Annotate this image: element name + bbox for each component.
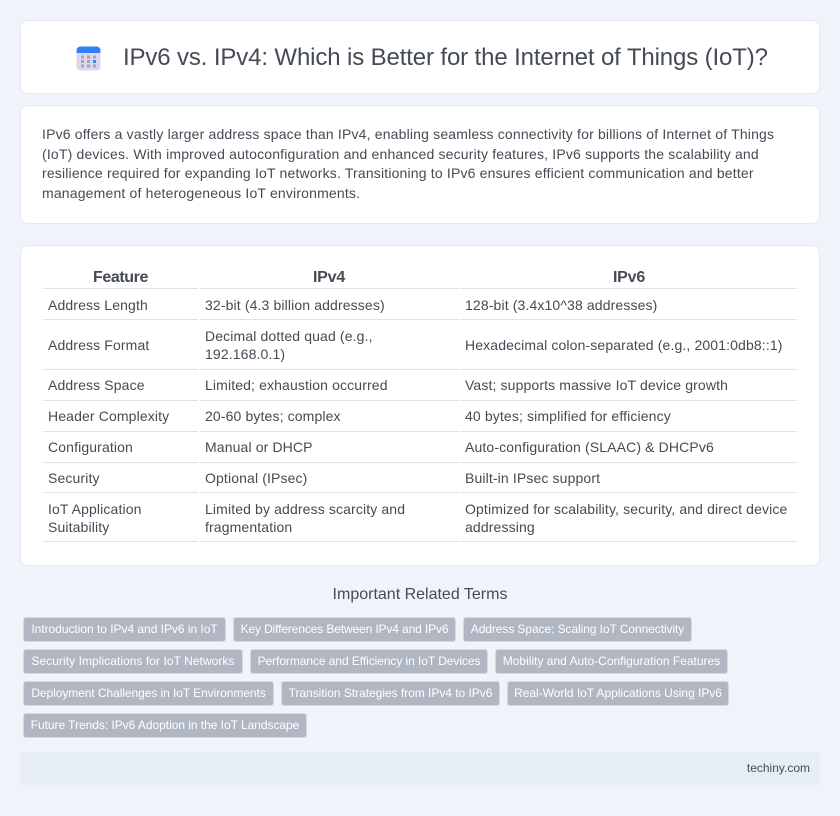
footer [20, 752, 820, 785]
related terms heading: Important Related Terms [333, 586, 507, 603]
row: configuration: Manual or DHCP [205, 439, 313, 455]
row: IoT application suitability [48, 501, 787, 535]
tag [251, 650, 487, 673]
row: header complexity: 40 bytes; simplified for efficiency [465, 408, 671, 424]
tag: Introduction to IPv4 and IPv6 in IoT [31, 622, 218, 636]
intro text [42, 126, 774, 201]
row: address format: Decimal dotted quad (e.g., [205, 328, 373, 344]
footer source: techiny.com [747, 761, 810, 775]
row: address space: Limited; exhaustion occurred [205, 377, 388, 393]
row: IoT application suitability: Suitability [48, 519, 109, 535]
tag [24, 682, 273, 705]
row: IoT application suitability: addressing [465, 519, 535, 535]
tag: Performance and Efficiency in IoT Devices [258, 654, 480, 668]
tag: Future Trends: IPv6 Adoption in the IoT Landscape [31, 718, 299, 732]
row: address format: 192.168.0.1) [205, 346, 285, 362]
tag: Transition Strategies from IPv4 to IPv6 [289, 686, 492, 700]
row: address length: Address Length [48, 297, 148, 313]
row: header complexity: 20-60 bytes; complex [205, 408, 341, 424]
intro text: resilience required for expanding IoT networks. Transitioning to IPv6 ensures efficient communication and better [42, 165, 754, 181]
tag [24, 714, 306, 737]
tag [282, 682, 499, 705]
row: configuration: Auto-configuration (SLAAC) & DHCPv6 [465, 439, 714, 455]
tag: Address Space: Scaling IoT Connectivity [471, 622, 684, 636]
tag [24, 618, 225, 641]
title: IPv6 vs. IPv4: Which is Better for the Internet of Things (IoT)? [123, 44, 768, 71]
panel: introduction [20, 105, 820, 224]
tag [24, 650, 242, 673]
row: security: Optional (IPsec) [205, 470, 307, 486]
row: IoT application suitability: Limited by address scarcity and [205, 501, 405, 517]
tag: Real-World IoT Applications Using IPv6 [514, 686, 722, 700]
row: address format: Address Format [48, 337, 149, 353]
row: IoT application suitability: fragmentation [205, 519, 292, 535]
row: address space: Vast; supports massive IoT device growth [465, 377, 728, 393]
row: header complexity [48, 408, 671, 424]
row: IoT application suitability: IoT Application [48, 501, 142, 517]
table header: Feature [93, 269, 148, 286]
row: header complexity: Header Complexity [48, 408, 169, 424]
row: address length: 32-bit (4.3 billion addresses) [205, 297, 385, 313]
intro text: IPv6 offers a vastly larger address space than IPv4, enabling seamless connectivity for billions of Internet of Things [42, 126, 774, 142]
tag: Mobility and Auto-Configuration Features [503, 654, 720, 668]
table header: IPv6 [613, 269, 645, 286]
tag: Security Implications for IoT Networks [31, 654, 235, 668]
row: IoT application suitability: Optimized for scalability, security, and direct device [465, 501, 787, 517]
row: address length: 128-bit (3.4x10^38 addresses) [465, 297, 657, 313]
row: configuration [48, 439, 714, 455]
tag [508, 682, 728, 705]
table header [93, 269, 645, 286]
tag [234, 618, 455, 641]
panel: title header [20, 20, 820, 94]
row: address space [48, 377, 728, 393]
row: security [48, 470, 600, 486]
tag [464, 618, 691, 641]
tag: Key Differences Between IPv4 and IPv6 [241, 622, 448, 636]
row: address format: Hexadecimal colon-separated (e.g., 2001:0db8::1) [465, 337, 783, 353]
row: security: Built-in IPsec support [465, 470, 600, 486]
comparison table [43, 269, 797, 542]
icon: calendar [76, 46, 100, 70]
row: address space: Address Space [48, 377, 145, 393]
related terms tags [23, 617, 729, 738]
row: security: Security [48, 470, 100, 486]
row: address length [48, 297, 657, 313]
row: configuration: Configuration [48, 439, 133, 455]
intro text: (IoT) devices. With improved autoconfiguration and enhanced security features, IPv6 supports the scalability and [42, 146, 759, 162]
intro text: management of heterogeneous IoT environments. [42, 185, 360, 201]
row: address format [48, 328, 783, 362]
tag: Deployment Challenges in IoT Environments [31, 686, 266, 700]
table header: IPv4 [313, 269, 345, 286]
panel: comparison table [20, 245, 820, 566]
tag [496, 650, 727, 673]
